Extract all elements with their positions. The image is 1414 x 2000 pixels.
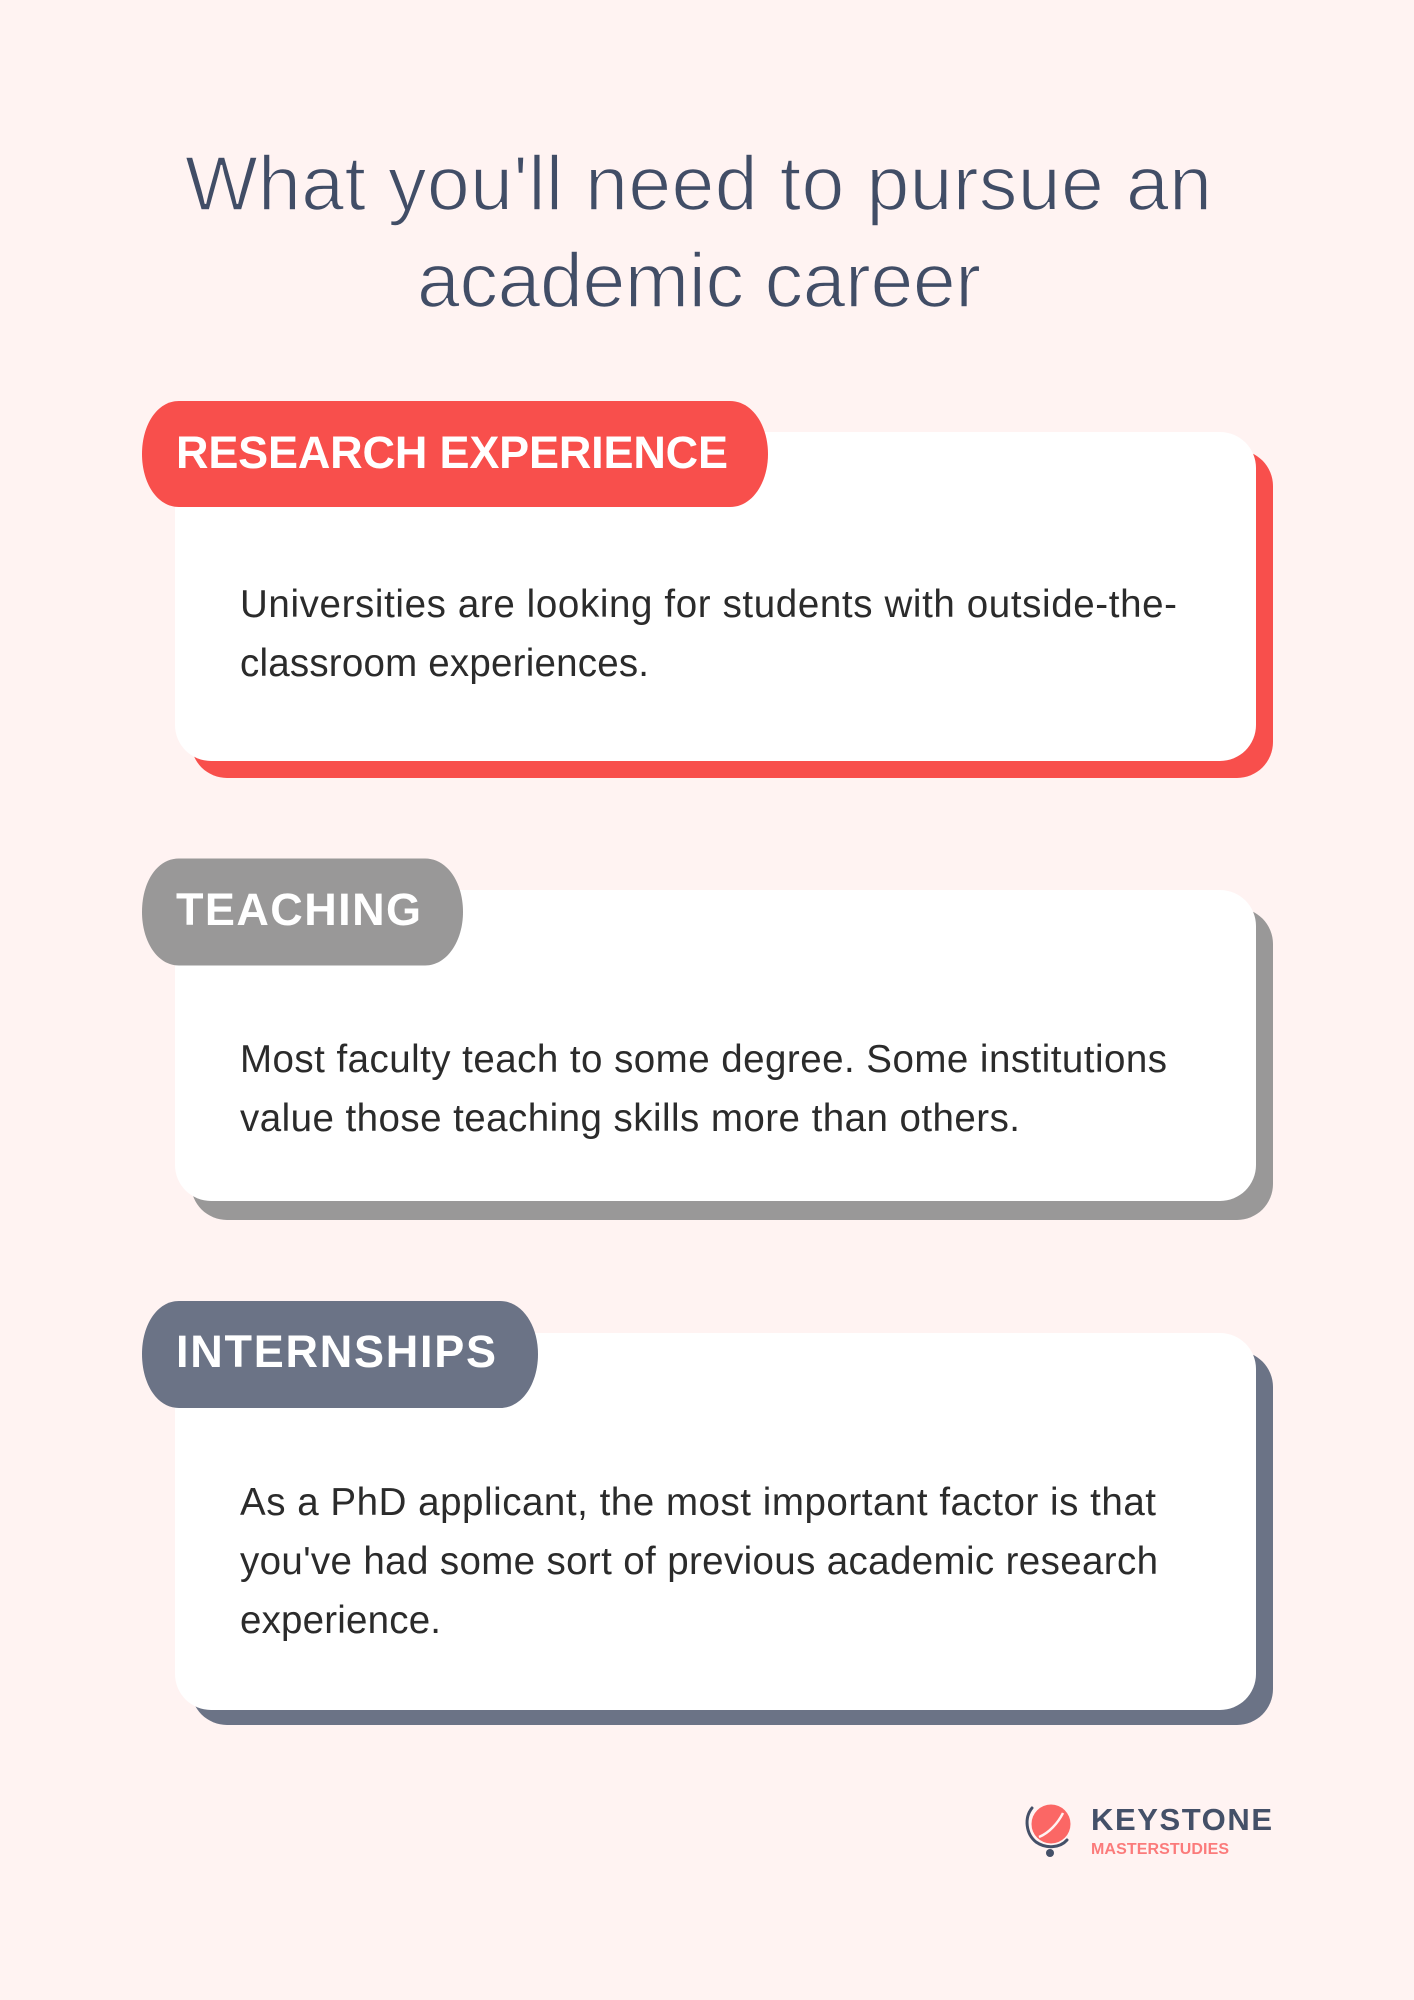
title: What you'll need to pursue an (185, 141, 1212, 227)
body text: teaching: Most faculty teach to some degree. Some institutions (240, 1038, 1167, 1081)
panel: research experience (142, 401, 1273, 778)
card: research (175, 432, 1256, 761)
card shadow: internships (191, 1351, 1273, 1725)
body text: internships: As a PhD applicant, the most important factor is that (240, 1481, 1156, 1524)
panel: internships (142, 1301, 1273, 1725)
body text: research: Universities are looking for students with outside-the- (240, 583, 1177, 626)
panel: teaching (142, 858, 1273, 1220)
body text: internships: you've had some sort of previous academic research (240, 1540, 1158, 1583)
body text: research: classroom experiences. (240, 642, 649, 685)
card shadow: research (191, 450, 1273, 778)
body text: teaching (240, 1038, 1167, 1140)
body text: internships: experience. (240, 1599, 441, 1642)
heading pill: research experience (142, 401, 768, 507)
body text: research (240, 583, 1177, 685)
body text: internships (240, 1481, 1158, 1642)
heading pill: internships (142, 1301, 538, 1408)
heading pill: research experience: RESEARCH EXPERIENCE (176, 427, 728, 478)
body text: teaching: value those teaching skills more than others. (240, 1097, 1020, 1140)
heading pill: teaching: TEACHING (176, 884, 421, 935)
logo: Keystone Masterstudies (1027, 1802, 1272, 1858)
icon: globe (1027, 1804, 1070, 1857)
title: academic career (417, 238, 981, 324)
heading pill: teaching (142, 858, 463, 966)
wordmark: KEYSTONE (1091, 1802, 1272, 1837)
card: internships (175, 1333, 1256, 1710)
heading pill: internships: INTERNSHIPS (176, 1326, 496, 1377)
card shadow: teaching (191, 908, 1273, 1220)
card: teaching (175, 890, 1256, 1201)
title (185, 141, 1212, 324)
tagline: MASTERSTUDIES (1091, 1841, 1229, 1858)
